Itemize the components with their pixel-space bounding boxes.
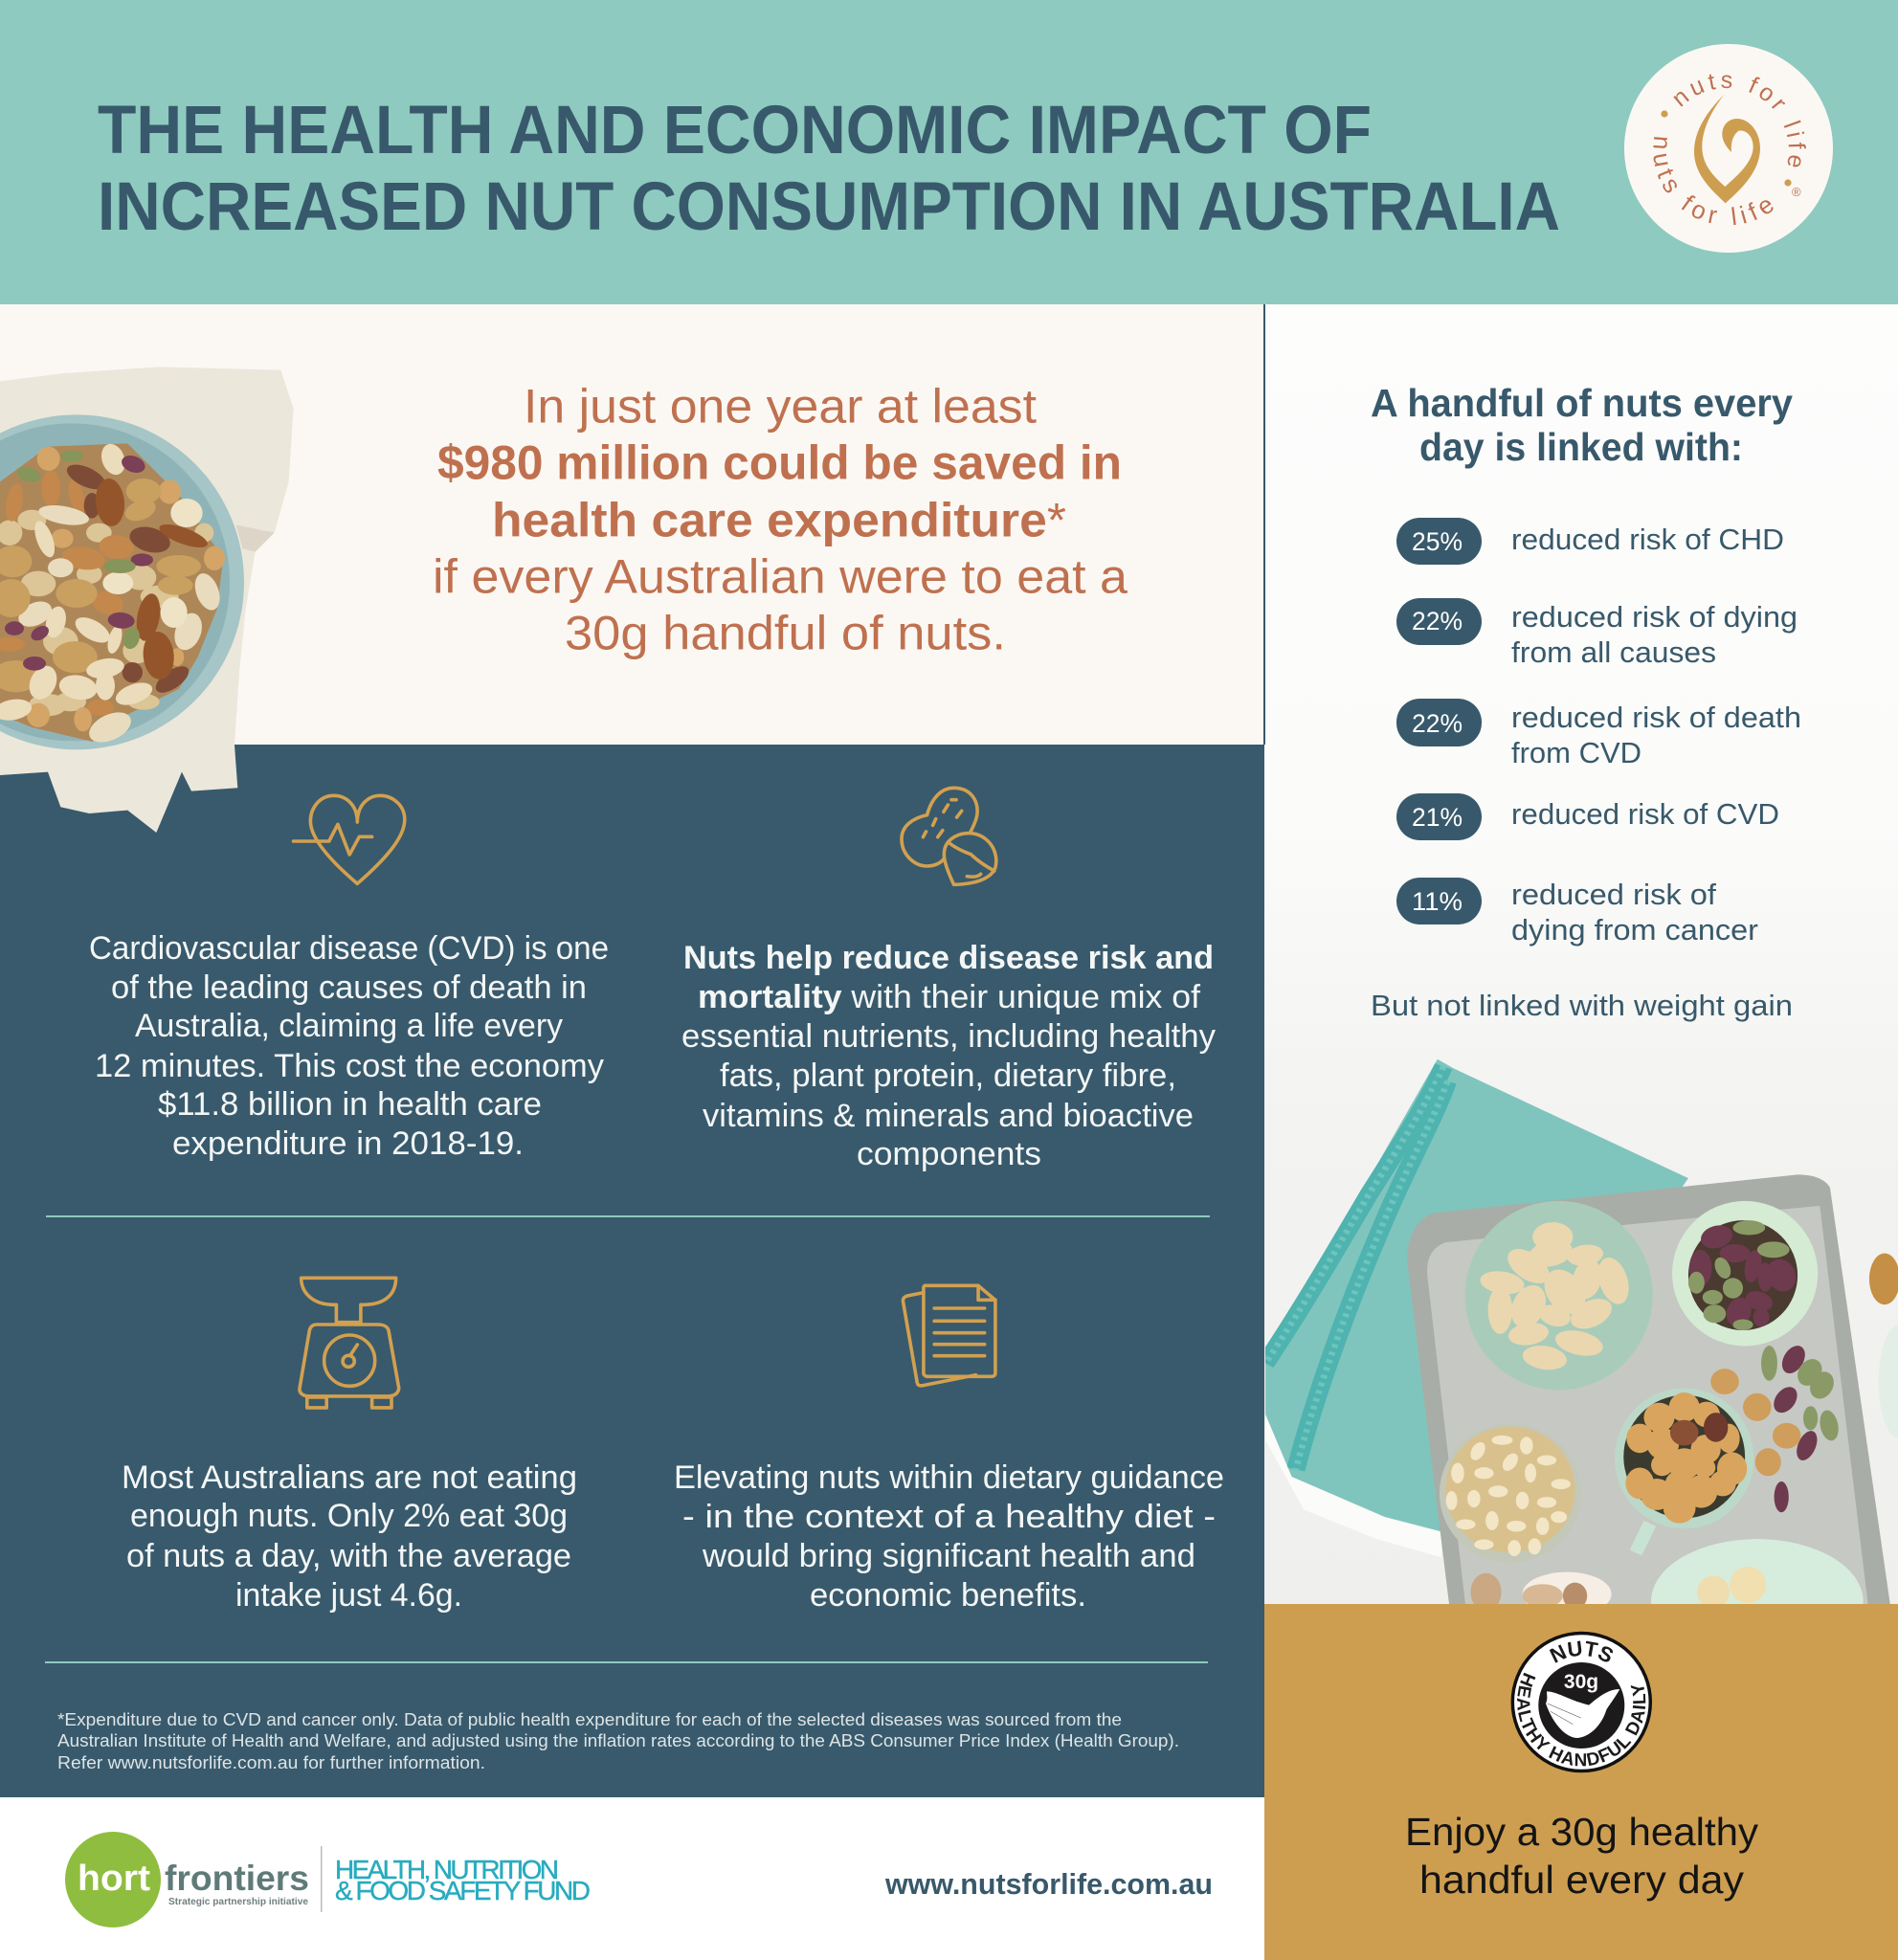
headline statement: $980 million could be saved in bbox=[437, 436, 1122, 490]
stat: 25% CHD bbox=[1396, 518, 1784, 565]
footnote: Refer www.nutsforlife.com.au for further information. bbox=[57, 1752, 485, 1772]
headline statement: 30g handful of nuts. bbox=[565, 607, 1006, 660]
logo: hort frontiers bbox=[65, 1832, 591, 1927]
logo: hort frontiers: hort bbox=[78, 1859, 150, 1899]
panel: header band bbox=[0, 0, 1898, 304]
text: nuts help reduce disease risk: Nuts help reduce disease risk and bbox=[683, 940, 1214, 976]
heading: handful of nuts: A handful of nuts every bbox=[1371, 381, 1793, 425]
footnote bbox=[57, 1709, 1179, 1772]
logo: nuts for life: ® bbox=[1792, 185, 1801, 199]
stat: 22% all causes bbox=[1396, 598, 1798, 669]
panel: footer bbox=[0, 1797, 1264, 1960]
text: dietary guidance: - in the context of a healthy diet - bbox=[682, 1499, 1216, 1535]
stat: 22% all causes: from all causes bbox=[1511, 635, 1716, 669]
stat: 11% cancer: 11% bbox=[1412, 887, 1463, 916]
logo: nuts for life: nuts for life bbox=[1653, 137, 1773, 226]
note: weight gain: But not linked with weight gain bbox=[1371, 989, 1793, 1022]
text: enjoy a 30g handful bbox=[1405, 1810, 1759, 1902]
icon: kitchen scale bbox=[300, 1278, 399, 1408]
stat: 11% cancer: reduced risk of bbox=[1511, 878, 1716, 911]
text: dietary guidance: economic benefits. bbox=[810, 1577, 1086, 1614]
headline statement: if every Australian were to eat a bbox=[433, 549, 1128, 603]
title bbox=[98, 93, 1560, 245]
stat: 22% death from CVD: from CVD bbox=[1511, 736, 1641, 769]
heading: handful of nuts bbox=[1371, 381, 1793, 469]
text: nuts help reduce disease risk: mortality with their unique mix of bbox=[698, 979, 1201, 1015]
stat: 11% cancer: dying from cancer bbox=[1511, 913, 1758, 947]
text: CVD fact: of the leading causes of death in bbox=[111, 969, 587, 1006]
photo: tray of nuts in bowls bbox=[1265, 1059, 1898, 1663]
icon: heart with pulse bbox=[294, 795, 405, 883]
stat: 22% death from CVD: reduced risk of death bbox=[1511, 701, 1801, 734]
text: CVD fact: $11.8 billion in health care bbox=[158, 1086, 542, 1123]
logo: hort frontiers: Strategic partnership initiative bbox=[168, 1896, 308, 1907]
icon: peanut and nut bbox=[902, 788, 996, 884]
badge: healthy handful daily: 30g bbox=[1564, 1671, 1598, 1693]
stat: 21% CVD bbox=[1396, 793, 1779, 840]
website url: www.nutsforlife.com.au bbox=[884, 1867, 1213, 1901]
text: nuts help reduce disease risk: vitamins & minerals and bioactive bbox=[703, 1098, 1194, 1134]
headline statement bbox=[433, 379, 1128, 660]
stat: 25% CHD: reduced risk of CHD bbox=[1511, 523, 1784, 556]
logo: hort frontiers: HEALTH, NUTRITION bbox=[335, 1855, 559, 1884]
badge: healthy handful daily: HEALTHY HANDFUL DAILY bbox=[1517, 1673, 1646, 1767]
logo: hort frontiers: & FOOD SAFETY FUND bbox=[335, 1876, 591, 1905]
stat: 22% death from CVD bbox=[1396, 699, 1801, 769]
logo: hort frontiers: frontiers bbox=[165, 1859, 309, 1898]
text: intake fact: intake just 4.6g. bbox=[235, 1577, 462, 1614]
text: CVD fact: Cardiovascular disease (CVD) is one bbox=[89, 930, 609, 967]
photo: bowl of mixed nuts on linen bbox=[0, 367, 294, 833]
text: intake fact: Most Australians are not eating bbox=[122, 1459, 577, 1496]
title: INCREASED NUT CONSUMPTION IN AUSTRALIA bbox=[98, 169, 1560, 245]
text: CVD fact: 12 minutes. This cost the economy bbox=[95, 1048, 604, 1084]
footnote: Australian Institute of Health and Welfare, and adjusted using the inflation rates according to the ABS Consumer Price Index (Health Group). bbox=[57, 1730, 1179, 1750]
text: nuts help reduce disease risk bbox=[681, 940, 1216, 1172]
panel: right column background bbox=[1264, 304, 1898, 1606]
stat: 11% cancer bbox=[1396, 878, 1758, 947]
footnote: *Expenditure due to CVD and cancer only. Data of public health expenditure for each of the selected diseases was sourced from the bbox=[57, 1709, 1122, 1729]
panel: dark facts background bbox=[0, 745, 1264, 1797]
stat: 22% all causes: reduced risk of dying bbox=[1511, 600, 1798, 634]
text: dietary guidance: Elevating nuts within dietary guidance bbox=[674, 1459, 1224, 1496]
text: intake fact bbox=[122, 1459, 577, 1614]
panel: gold call to action bbox=[1264, 1604, 1898, 1960]
text: intake fact: of nuts a day, with the average bbox=[126, 1538, 571, 1574]
stat: 21% CVD: reduced risk of CVD bbox=[1511, 797, 1779, 831]
logo: nuts for life bbox=[1624, 44, 1833, 253]
stat: 21% CVD: 21% bbox=[1412, 803, 1463, 832]
heading: handful of nuts: day is linked with: bbox=[1419, 425, 1743, 469]
text: CVD fact: expenditure in 2018-19. bbox=[172, 1125, 524, 1162]
text: enjoy a 30g handful: Enjoy a 30g healthy bbox=[1405, 1810, 1759, 1854]
title: THE HEALTH AND ECONOMIC IMPACT OF bbox=[98, 93, 1372, 168]
text: dietary guidance bbox=[674, 1459, 1224, 1614]
stat: 25% CHD: 25% bbox=[1412, 527, 1463, 556]
badge: healthy handful daily bbox=[1510, 1631, 1652, 1772]
text: dietary guidance: would bring significant health and bbox=[702, 1538, 1195, 1574]
stat: 22% all causes: 22% bbox=[1412, 607, 1463, 635]
logo: nuts for life: nuts for life bbox=[1673, 75, 1806, 167]
text: nuts help reduce disease risk: essential nutrients, including healthy bbox=[681, 1018, 1216, 1055]
text: enjoy a 30g handful: handful every day bbox=[1419, 1858, 1745, 1902]
stat: 22% death from CVD: 22% bbox=[1412, 709, 1463, 738]
vertical divider bbox=[1263, 304, 1265, 745]
icon: documents bbox=[903, 1285, 995, 1386]
text: nuts help reduce disease risk: fats, plant protein, dietary fibre, bbox=[720, 1058, 1176, 1094]
text: intake fact: enough nuts. Only 2% eat 30g bbox=[130, 1498, 568, 1534]
headline statement: health care expenditure * bbox=[492, 494, 1066, 547]
headline statement: In just one year at least bbox=[524, 379, 1037, 433]
panel: headline background bbox=[0, 304, 1263, 745]
text: nuts help reduce disease risk: components bbox=[857, 1136, 1041, 1172]
text: CVD fact: Australia, claiming a life every bbox=[135, 1008, 563, 1044]
badge: healthy handful daily: NUTS bbox=[1549, 1640, 1613, 1663]
text: CVD fact bbox=[89, 930, 609, 1162]
